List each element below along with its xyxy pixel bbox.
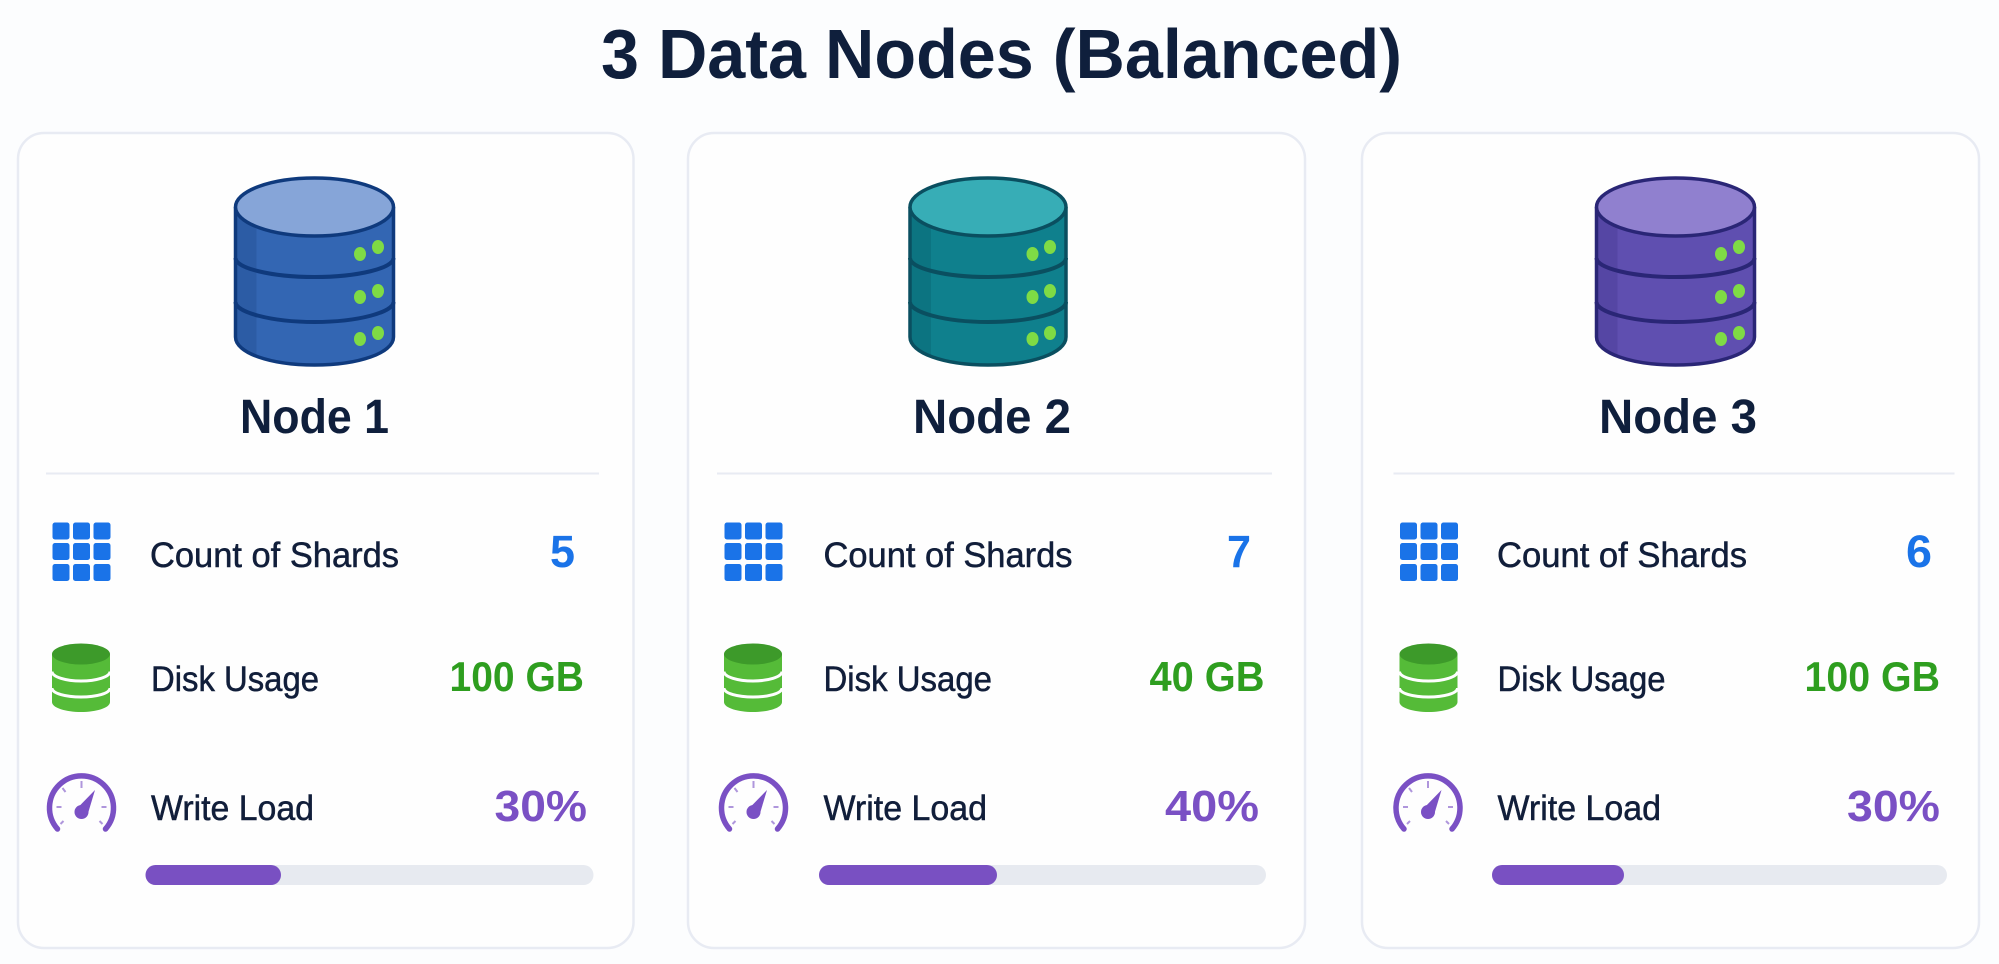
icon: disk xyxy=(724,644,782,712)
label: disk usage: Disk Usage xyxy=(1498,660,1666,699)
icon: teal database xyxy=(910,178,1066,365)
label: write load: Write Load xyxy=(151,789,314,828)
value: shards: 5 xyxy=(550,526,575,577)
icon: shard grid xyxy=(724,522,782,581)
icon: gauge xyxy=(722,776,786,829)
node name: Node 2 xyxy=(913,391,1071,444)
label: count of shards: Count of Shards xyxy=(824,536,1072,575)
value: write load: 30% xyxy=(494,782,587,831)
icon: gauge xyxy=(1396,776,1460,829)
panel: node 3 xyxy=(1362,133,1979,948)
value: write load: 40% xyxy=(1165,782,1259,831)
progress bar xyxy=(146,865,594,885)
icon: shard grid xyxy=(1400,522,1458,581)
card background xyxy=(688,133,1305,948)
label: count of shards: Count of Shards xyxy=(1497,536,1747,575)
icon: disk xyxy=(52,644,110,712)
value: shards: 7 xyxy=(1227,526,1251,577)
panel: node 2 xyxy=(688,133,1305,948)
progress bar xyxy=(1492,865,1947,885)
value: write load: 30% xyxy=(1847,782,1940,831)
value: disk: 100 GB xyxy=(450,653,584,700)
node name: Node 3 xyxy=(1599,391,1757,444)
value: shards: 6 xyxy=(1906,526,1932,577)
panel: node 1 xyxy=(18,133,634,948)
label: write load: Write Load xyxy=(1498,789,1661,828)
card background xyxy=(1362,133,1979,948)
label: disk usage: Disk Usage xyxy=(151,660,319,699)
progress bar xyxy=(819,865,1266,885)
icon: gauge xyxy=(50,776,114,829)
icon: purple database xyxy=(1596,178,1754,365)
card background xyxy=(18,133,634,948)
label: write load: Write Load xyxy=(824,789,987,828)
value: disk: 100 GB xyxy=(1804,653,1940,700)
icon: shard grid xyxy=(52,522,110,581)
title: 3 Data Nodes (Balanced) xyxy=(601,15,1402,93)
label: disk usage: Disk Usage xyxy=(824,660,992,699)
node name: Node 1 xyxy=(240,391,389,444)
icon: blue database xyxy=(236,178,394,365)
icon: disk xyxy=(1400,644,1458,712)
value: disk: 40 GB xyxy=(1150,653,1264,700)
label: count of shards: Count of Shards xyxy=(150,536,399,575)
